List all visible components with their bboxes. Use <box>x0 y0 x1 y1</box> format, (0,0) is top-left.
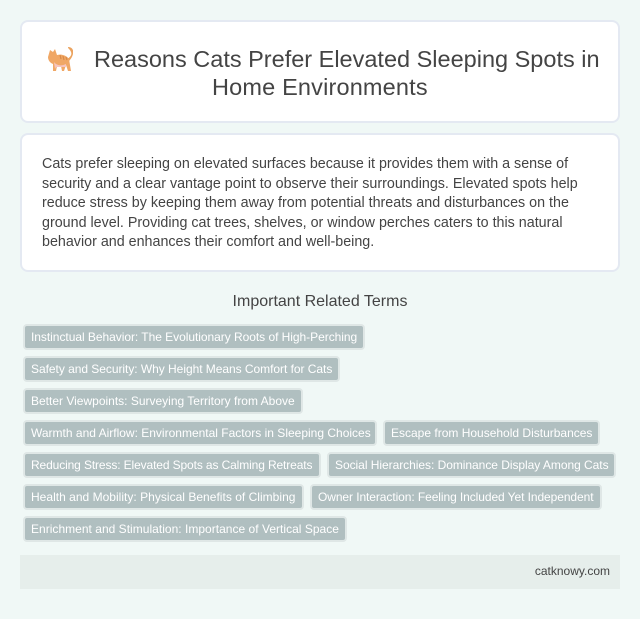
tag: warmth and airflow: Warmth and Airflow: Environmental Factors in Sleeping Choices <box>31 426 371 440</box>
tag: escape from disturbances <box>383 420 600 446</box>
tag: better viewpoints <box>23 388 303 414</box>
tag: instinctual behavior: Instinctual Behavior: The Evolutionary Roots of High-Perching <box>31 330 357 344</box>
heading: title: Reasons Cats Prefer Elevated Sleeping Spots in <box>94 46 600 72</box>
tag: enrichment and stimulation: Enrichment and Stimulation: Importance of Vertical Space <box>31 522 339 536</box>
tag: escape from disturbances: Escape from Household Disturbances <box>391 426 592 440</box>
tag: owner interaction <box>310 484 602 510</box>
panel: title card <box>20 20 620 123</box>
icon: cat <box>48 47 73 71</box>
tag: social hierarchies: Social Hierarchies: Dominance Display Among Cats <box>335 458 609 472</box>
tag: owner interaction: Owner Interaction: Feeling Included Yet Independent <box>318 490 593 504</box>
tag: safety and security <box>23 356 340 382</box>
tag: social hierarchies <box>327 452 616 478</box>
tag: reducing stress <box>23 452 321 478</box>
text block: description: behavior and enhances their comfort and well-being. <box>42 234 374 250</box>
tag: health and mobility <box>23 484 304 510</box>
footer: source: catknowy.com <box>535 564 610 578</box>
heading: title: Home Environments <box>212 74 428 100</box>
text block: description <box>42 156 578 250</box>
tag: warmth and airflow <box>23 420 377 446</box>
heading: important related terms: Important Related Terms <box>233 293 407 310</box>
tag: better viewpoints: Better Viewpoints: Surveying Territory from Above <box>31 394 295 408</box>
text block: description: security and a clear vantage point to observe their surroundings. Elevated spots help <box>42 176 578 192</box>
text block: description: Cats prefer sleeping on elevated surfaces because it provides them with a sense of <box>42 156 568 172</box>
tag list <box>23 324 616 542</box>
text block: description: ground level. Providing cat trees, shelves, or window perches caters to this natural <box>42 214 563 230</box>
tag: reducing stress: Reducing Stress: Elevated Spots as Calming Retreats <box>31 458 312 472</box>
panel: description card <box>20 133 620 272</box>
tag: health and mobility: Health and Mobility: Physical Benefits of Climbing <box>31 490 295 504</box>
footer bar <box>20 555 620 589</box>
text block: description: reduce stress by keeping them away from potential threats and disturbances on the <box>42 195 569 211</box>
tag: enrichment and stimulation <box>23 516 347 542</box>
tag: safety and security: Safety and Security: Why Height Means Comfort for Cats <box>31 362 332 376</box>
tag: instinctual behavior <box>23 324 365 350</box>
heading: title <box>94 46 600 100</box>
